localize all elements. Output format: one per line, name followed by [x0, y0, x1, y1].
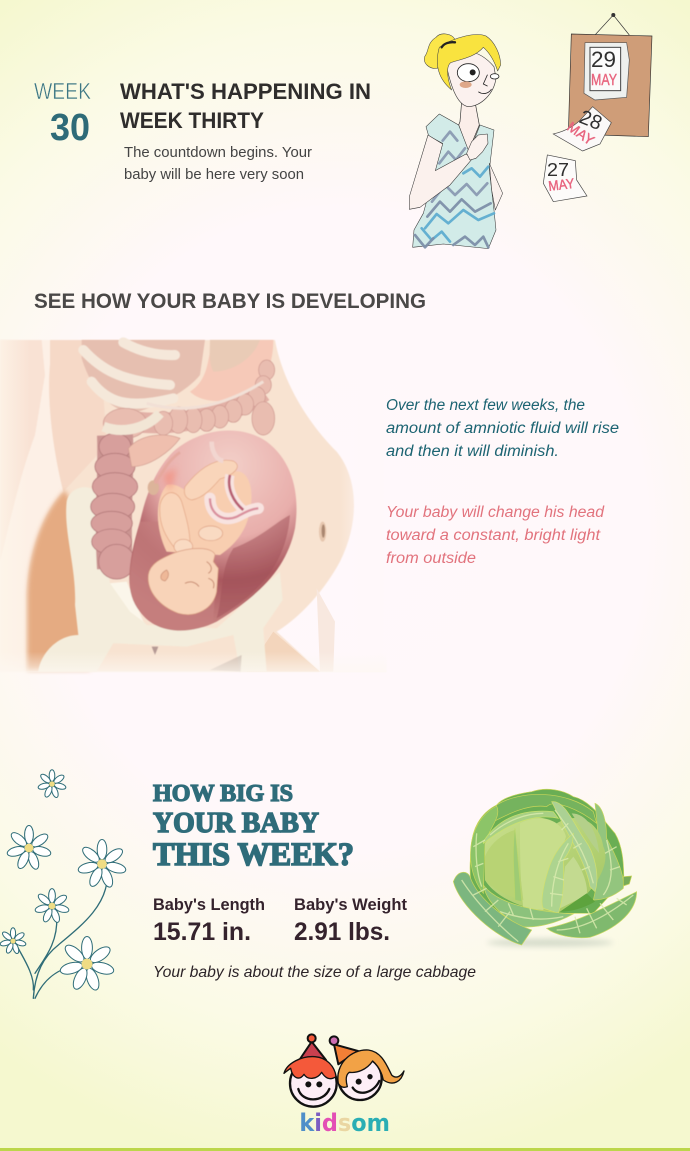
- header: week number: [34, 78, 92, 149]
- cabbage head: [485, 817, 605, 912]
- header: week number: 30: [50, 107, 90, 149]
- fetus leg: [184, 460, 237, 500]
- girl hair: [338, 1050, 404, 1087]
- face: [445, 51, 496, 107]
- arms: [409, 135, 473, 209]
- stat: weight: Baby's Weight: [294, 895, 407, 914]
- heading: how big: YOUR BABY: [153, 807, 319, 839]
- stat: length: 15.71 in.: [153, 918, 251, 946]
- logo wordmark: kidsom: [299, 1109, 390, 1137]
- stat: length: [153, 895, 265, 946]
- nose and mouth: [479, 75, 491, 94]
- neck and chest: [459, 102, 479, 152]
- date 28 May: 28: [576, 106, 605, 135]
- outer leaves: [470, 789, 632, 913]
- lower rib band: [103, 413, 160, 430]
- boy hat: [299, 1034, 326, 1060]
- illustration: pregnant woman: [409, 34, 503, 249]
- girl face: [338, 1057, 382, 1100]
- pale veins: [462, 810, 633, 942]
- boy eyes and smile: [298, 1081, 329, 1099]
- text: amniotic fluid: [386, 397, 619, 460]
- girl eyes and smile: [353, 1074, 379, 1093]
- daisy: [59, 936, 115, 992]
- daisy: [34, 889, 70, 923]
- fetus body: [158, 471, 252, 555]
- daisy: [0, 928, 26, 954]
- illustration: baby in womb: [0, 335, 387, 678]
- text: head and light: toward a constant, bright light: [386, 527, 601, 544]
- hair tie: [442, 42, 455, 47]
- text: amniotic fluid: and then it will diminish.: [386, 443, 559, 460]
- red glow: [163, 468, 177, 492]
- uterus: [129, 431, 297, 631]
- intro text: baby will be here very soon: [124, 167, 304, 183]
- transverse colon: [133, 392, 263, 423]
- daisy: [37, 770, 67, 798]
- daisy: [6, 826, 52, 871]
- descending colon: [114, 435, 115, 568]
- text: amniotic fluid: Over the next few weeks, the: [386, 397, 585, 414]
- footer bar: [0, 1148, 690, 1151]
- edge fades: [0, 335, 387, 678]
- illustration: calendar: MAY: [591, 72, 617, 89]
- lower-left shading: [27, 490, 90, 670]
- boy hair: [284, 1057, 336, 1079]
- illustration: cabbage: [453, 789, 637, 947]
- umbilical cord: [210, 498, 258, 519]
- eye: [457, 64, 479, 82]
- leaf ribs: [483, 811, 558, 843]
- fetus head: [148, 549, 218, 615]
- date 27 May: 27: [547, 160, 569, 180]
- size comparison text: Your baby is about the size of a large cabbage: [153, 964, 476, 981]
- base skin tone: [0, 340, 354, 672]
- girl hat: [330, 1036, 358, 1064]
- heading: how big: THIS WEEK?: [153, 837, 354, 873]
- section heading: SEE HOW YOUR BABY IS DEVELOPING: [34, 290, 426, 313]
- illustration: daisies: [0, 770, 127, 998]
- dress: [413, 114, 496, 249]
- stomach: [190, 340, 273, 401]
- stat: weight: [294, 895, 407, 946]
- header: week number: WEEK: [34, 78, 92, 104]
- dress zigzags: [415, 132, 494, 247]
- text: head and light: [386, 504, 605, 567]
- colon fold: [128, 435, 180, 467]
- placenta: [148, 480, 159, 495]
- hair: [437, 35, 501, 90]
- logo: kidsom: [284, 1034, 404, 1137]
- heading: what's happening: WEEK THIRTY: [120, 108, 264, 133]
- intro text: The countdown begins. Your: [124, 145, 312, 161]
- illustration: calendar: [543, 13, 652, 202]
- text: head and light: from outside: [386, 550, 476, 567]
- daisy: [77, 840, 127, 889]
- stat: weight: 2.91 lbs.: [294, 918, 390, 946]
- fetus arm: [160, 493, 190, 548]
- hair bun: [424, 34, 455, 68]
- date 29 May: 29: [591, 47, 616, 72]
- navel: [319, 522, 326, 542]
- hand: [467, 134, 488, 160]
- cheek: [460, 81, 472, 88]
- pelvis: [38, 487, 283, 672]
- illustration: calendar: MAY: [564, 118, 598, 149]
- heading: how big: HOW BIG IS: [153, 781, 293, 807]
- heading: what's happening: [120, 79, 371, 133]
- stat: length: Baby's Length: [153, 895, 265, 914]
- text: amniotic fluid: amount of amniotic fluid will rise: [386, 420, 619, 437]
- front leaves: [483, 885, 573, 927]
- heading: how big: [153, 781, 354, 873]
- calendar board: [543, 13, 652, 202]
- text: head and light: Your baby will change his head: [386, 504, 605, 521]
- illustration: calendar: MAY: [547, 175, 576, 194]
- ribcage: [82, 340, 205, 413]
- intro text: [124, 145, 312, 183]
- boy face: [290, 1060, 337, 1107]
- stems: [17, 877, 107, 998]
- shadow: [487, 939, 613, 947]
- heading: what's happening: WHAT'S HAPPENING IN: [120, 79, 371, 104]
